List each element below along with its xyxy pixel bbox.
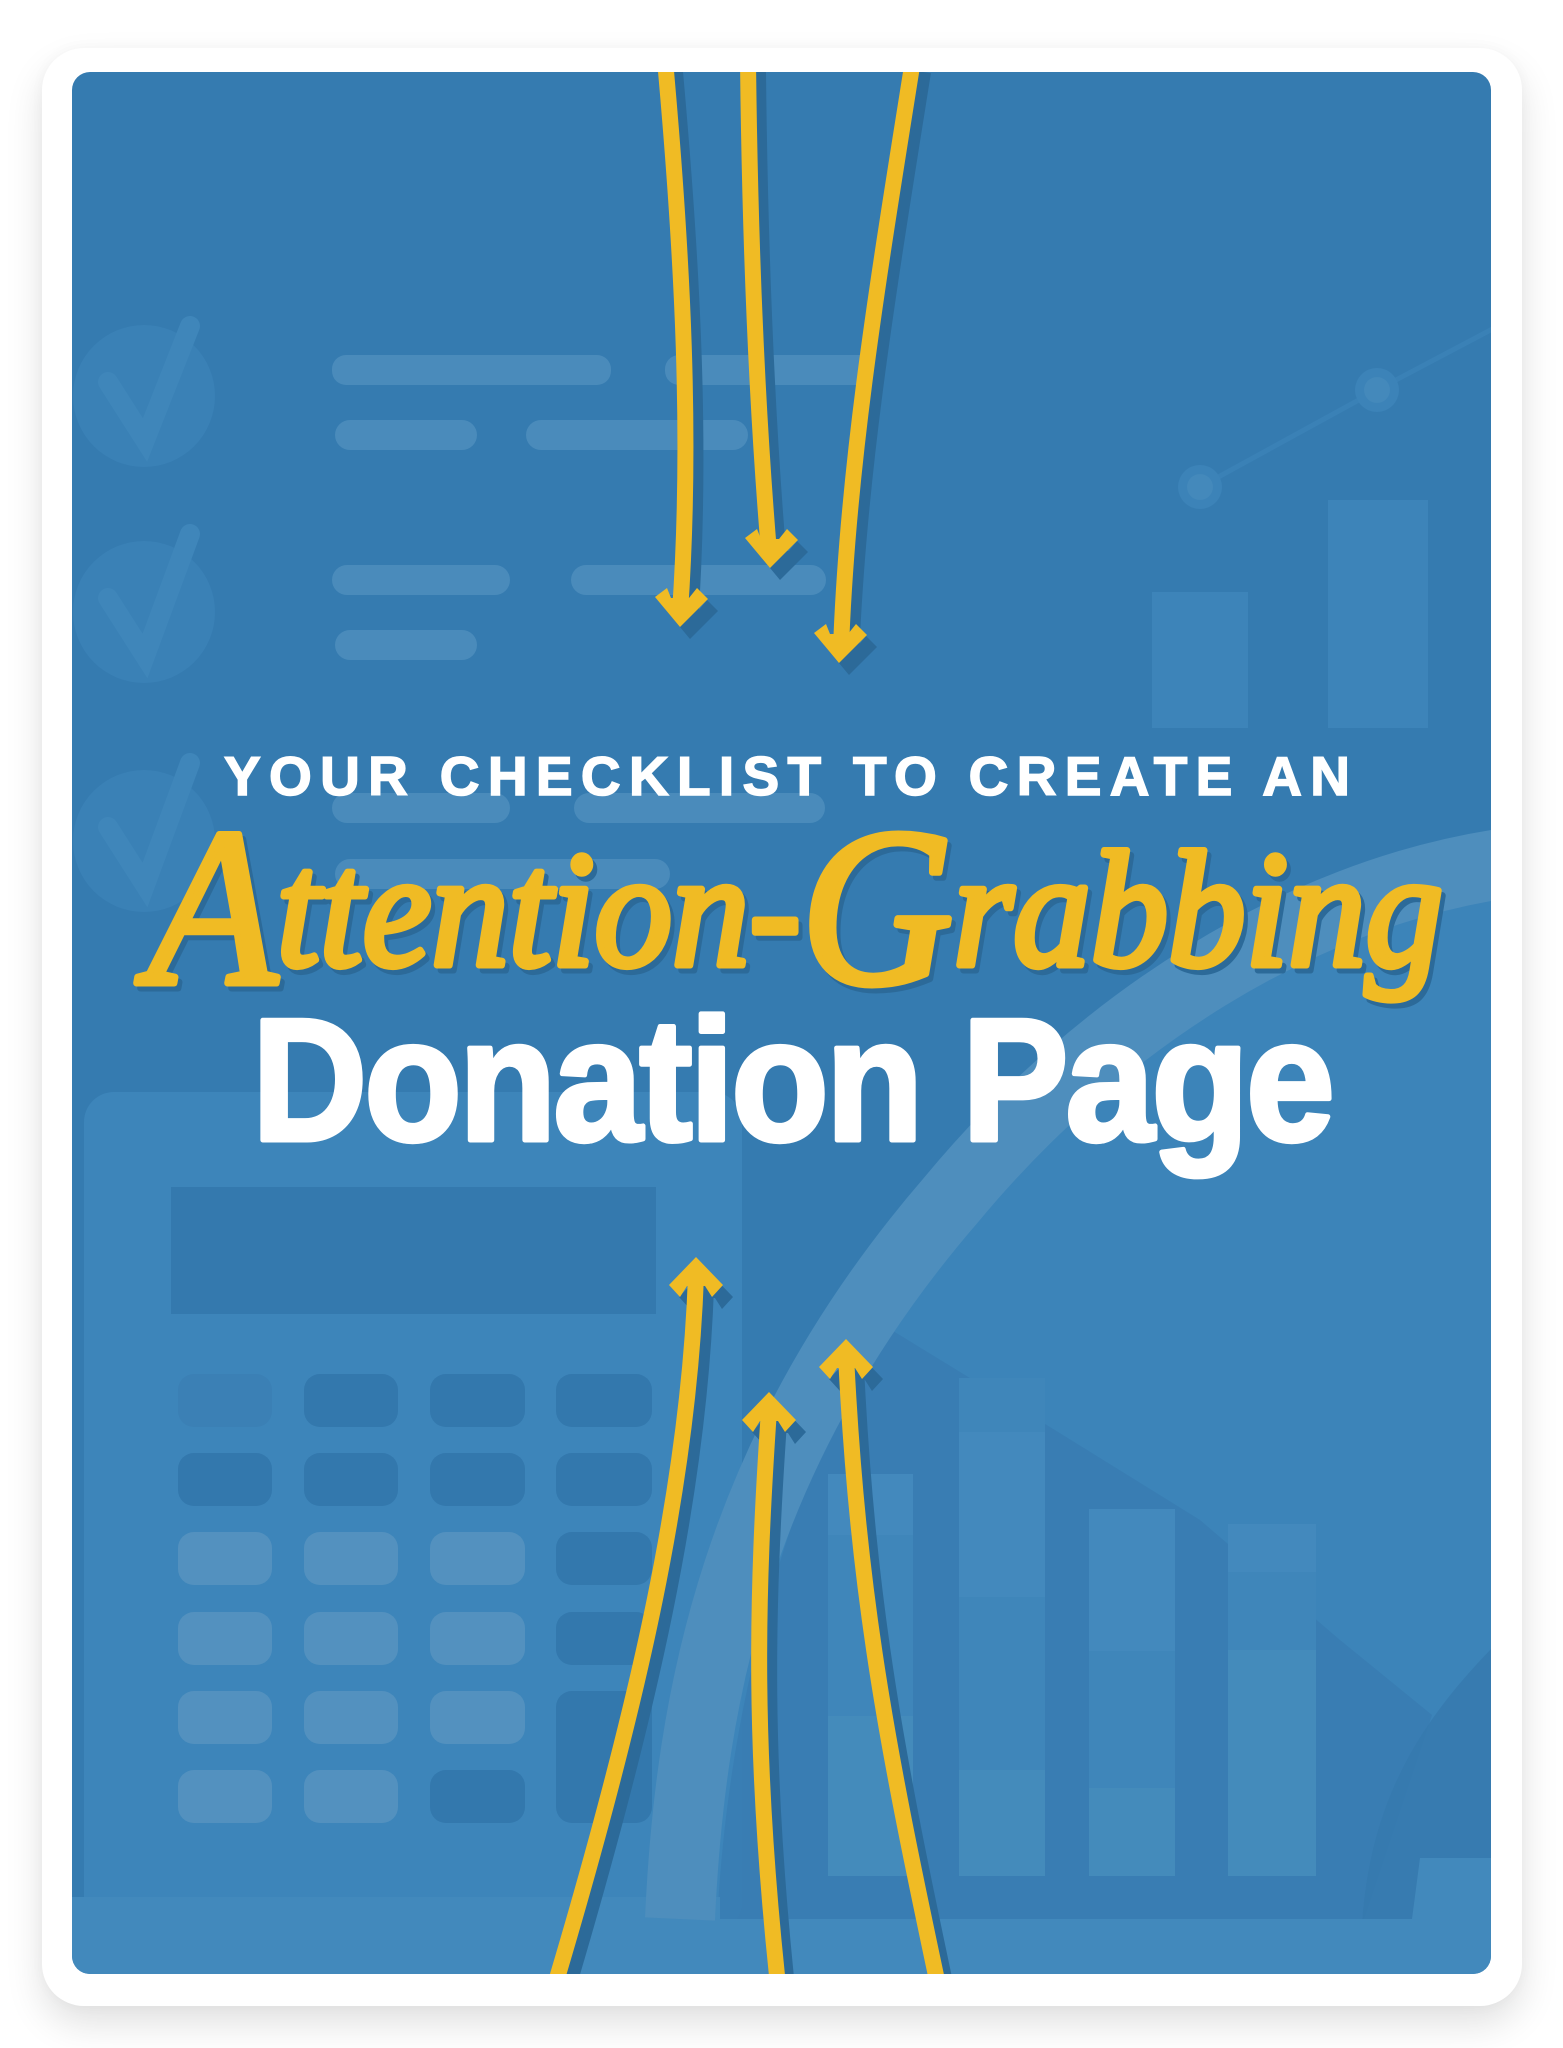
dark corner	[1364, 1650, 1491, 1919]
script heading: rabbing	[953, 818, 1443, 1001]
main heading: Donation Page	[252, 982, 1332, 1177]
checklist row 1	[73, 325, 883, 467]
growth chart top right	[1152, 377, 1428, 728]
script heading: ttention-	[277, 818, 801, 1001]
arrows from bottom	[555, 1257, 948, 1997]
checklist row 3	[73, 763, 825, 912]
lighter area under the curve	[742, 902, 1491, 1722]
script heading: G	[801, 782, 953, 1032]
kicker heading: YOUR CHECKLIST TO CREATE AN	[224, 745, 1350, 807]
script heading: A	[136, 782, 278, 1032]
curved swoosh	[680, 864, 1500, 1919]
darker area behind bars	[717, 1320, 1432, 1925]
stacked bars	[828, 1378, 1316, 1876]
calculator	[84, 1092, 742, 1932]
arrows from top	[655, 60, 923, 675]
base strip	[72, 1858, 1500, 1980]
checklist row 2	[73, 534, 826, 683]
